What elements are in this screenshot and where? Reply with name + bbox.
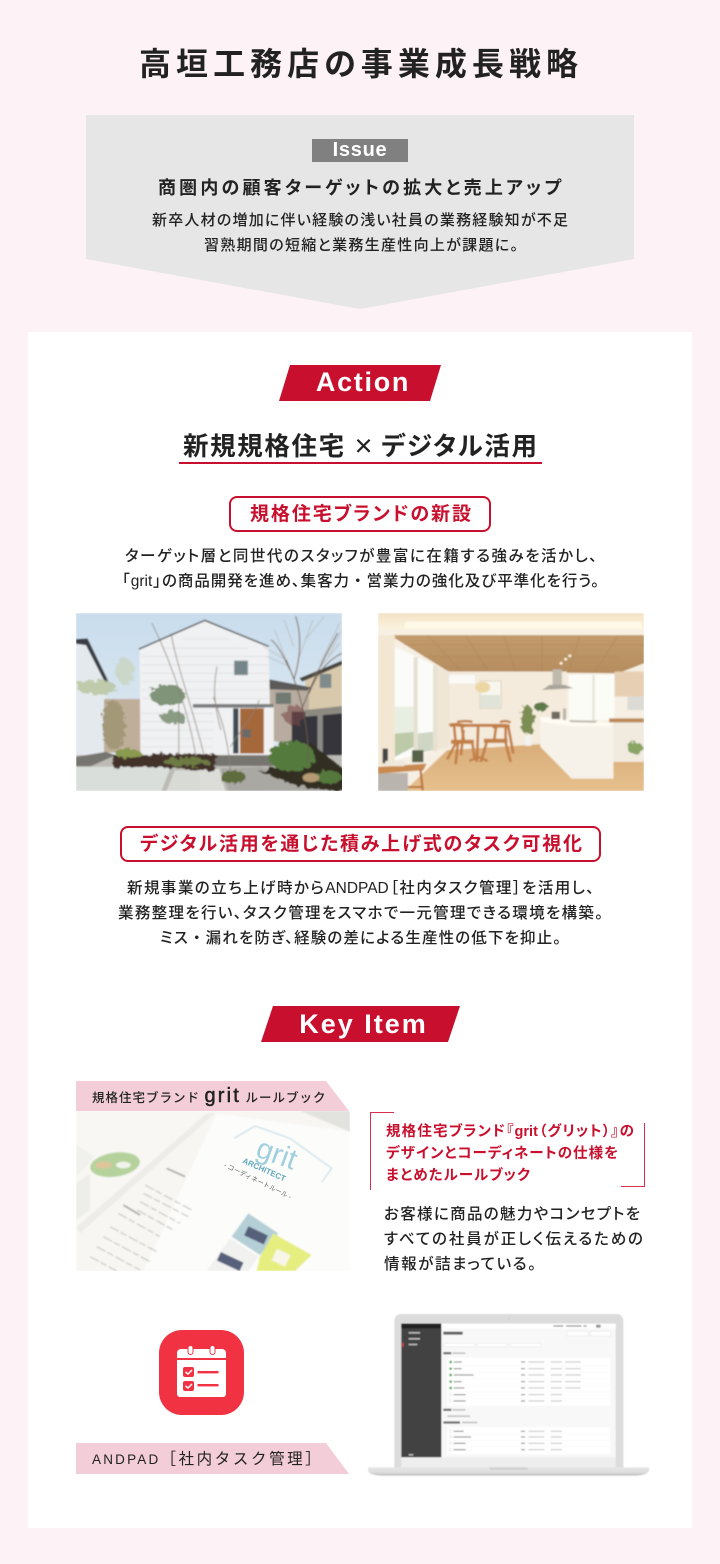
icon: andpad calendar app xyxy=(159,1330,244,1415)
text: digital description xyxy=(118,880,603,947)
issue background arrow xyxy=(86,115,634,309)
text: digital description: 業務整理を行い、タスク管理をスマホで一元管理できる環境を構築。 xyxy=(118,905,603,922)
label: rule book xyxy=(76,1081,349,1111)
issue badge: Issue xyxy=(333,139,387,161)
action heading: 新規規格住宅 × デジタル活用 xyxy=(183,428,537,463)
text: rule book description: すべての社員が正しく伝えるための xyxy=(384,1231,643,1248)
issue description xyxy=(152,212,568,254)
photo: interior xyxy=(378,613,644,791)
action banner: Action xyxy=(316,367,410,397)
bracket: bottom right xyxy=(621,1123,645,1187)
text: rule book description: 情報が詰まっている。 xyxy=(384,1256,536,1273)
panel: issue xyxy=(86,115,634,309)
photo: house exterior xyxy=(76,613,342,791)
rule book logo text: grit xyxy=(252,1132,302,1177)
rule book logo text: - コーディネートルール - xyxy=(222,1160,293,1201)
pill: digital use: デジタル活用を通じた積み上げ式のタスク可視化 xyxy=(140,834,582,855)
text: rule book description xyxy=(384,1206,643,1273)
rule book logo text: ARCHITECT xyxy=(241,1156,287,1183)
pill: brand launch xyxy=(229,496,491,532)
action banner xyxy=(279,365,441,401)
panel: main white xyxy=(28,332,692,1528)
rule book logo text xyxy=(222,1132,302,1201)
issue heading: 商圏内の顧客ターゲットの拡大と売上アップ xyxy=(158,178,561,198)
photo: rule book xyxy=(76,1111,350,1271)
callout text: デザインとコーディネートの仕様を xyxy=(386,1146,618,1162)
callout text xyxy=(386,1123,634,1184)
label: rule book: 規格住宅ブランド grit ルールブック xyxy=(92,1085,327,1107)
issue badge xyxy=(312,139,408,162)
text: brand description: ターゲット層と同世代のスタッフが豊富に在籍する強みを活かし、 xyxy=(125,548,597,565)
label: andpad xyxy=(76,1443,349,1474)
text: digital description: 新規事業の立ち上げ時からANDPAD［社内タスク管理］を活用し、 xyxy=(127,880,594,897)
text: rule book description: お客様に商品の魅力やコンセプトを xyxy=(384,1206,640,1223)
key item banner: Key Item xyxy=(299,1009,428,1039)
callout text: まとめたルールブック xyxy=(386,1168,530,1184)
pill: brand launch: 規格住宅ブランドの新設 xyxy=(250,504,471,525)
callout: rule book summary xyxy=(370,1112,645,1190)
pill: digital use xyxy=(120,826,601,862)
text: digital description: ミス・漏れを防ぎ、経験の差による生産性の低下を抑止。 xyxy=(160,930,561,947)
label: andpad: ANDPAD［社内タスク管理］ xyxy=(92,1451,323,1468)
text: brand description: 「grit」の商品開発を進め、集客力・営業力の強化及び平準化を行う。 xyxy=(122,573,599,590)
title: 高垣工務店の事業成長戦略 xyxy=(139,46,578,82)
callout text: 規格住宅ブランド『grit（グリット）』の xyxy=(386,1124,634,1140)
bracket: top left xyxy=(370,1112,394,1190)
laptop with task app screen xyxy=(368,1314,650,1476)
issue description: 習熟期間の短縮と業務生産性向上が課題に。 xyxy=(204,237,518,254)
issue description: 新卒人材の増加に伴い経験の浅い社員の業務経験知が不足 xyxy=(152,212,568,229)
text: brand description xyxy=(122,548,599,590)
key item banner xyxy=(261,1006,460,1042)
